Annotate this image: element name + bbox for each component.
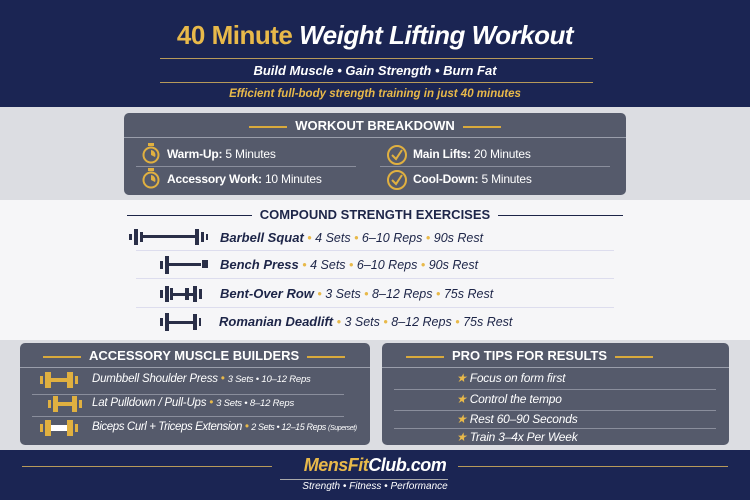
icon: stopwatch 2 <box>142 168 160 188</box>
icon: barbell <box>129 229 208 245</box>
footer tagline: Strength • Fitness • Performance <box>302 481 448 492</box>
panel: compound exercises <box>0 200 750 340</box>
tip 3: ★ Rest 60–90 Seconds <box>456 412 578 426</box>
subtitle: Build Muscle • Gain Strength • Burn Fat <box>253 63 497 78</box>
item: curl: Biceps Curl + Triceps Extension • 2 Sets • 12–15 Reps (Superset) <box>92 421 357 433</box>
panel: workout breakdown <box>124 113 626 195</box>
item: pulldown: Lat Pulldown / Pull-Ups • 3 Sets • 8–12 Reps <box>92 397 294 409</box>
heading: ACCESSORY MUSCLE BUILDERS <box>89 348 299 363</box>
item: cool-down: Cool-Down: 5 Minutes <box>413 172 532 186</box>
exercise: rdl: Romanian Deadlift • 3 Sets • 8–12 Reps • 75s Rest <box>219 314 512 329</box>
tagline: Efficient full-body strength training in just 40 minutes <box>229 88 521 100</box>
item: accessory: Accessory Work: 10 Minutes <box>167 172 322 186</box>
title: 40 Minute Weight Lifting Workout <box>177 20 573 50</box>
heading: COMPOUND STRENGTH EXERCISES <box>260 207 490 222</box>
exercise: squat: Barbell Squat • 4 Sets • 6–10 Reps • 90s Rest <box>220 230 483 245</box>
tip 1: ★ Focus on form first <box>456 371 565 385</box>
item: main lifts: Main Lifts: 20 Minutes <box>413 147 531 161</box>
tip 2: ★ Control the tempo <box>456 392 562 406</box>
icon: stopwatch <box>142 143 160 164</box>
exercise: bench: Bench Press • 4 Sets • 6–10 Reps • 90s Rest <box>220 257 478 272</box>
brand: MensFitClub.com <box>304 455 446 475</box>
panel: pro tips <box>382 343 729 445</box>
icon: check <box>387 145 407 165</box>
icon: check 2 <box>387 170 407 190</box>
item: warm-up: Warm-Up: 5 Minutes <box>167 147 276 161</box>
heading: PRO TIPS FOR RESULTS <box>452 348 607 363</box>
tip 4: ★ Train 3–4x Per Week <box>456 430 578 444</box>
icon: dumbbell <box>40 372 78 388</box>
heading: WORKOUT BREAKDOWN <box>295 118 455 133</box>
item: shoulder press: Dumbbell Shoulder Press • 3 Sets • 10–12 Reps <box>92 373 311 385</box>
footer <box>0 450 750 500</box>
exercise: row: Bent-Over Row • 3 Sets • 8–12 Reps • 75s Rest <box>220 286 493 301</box>
header <box>0 0 750 107</box>
panel: accessory <box>20 343 370 445</box>
